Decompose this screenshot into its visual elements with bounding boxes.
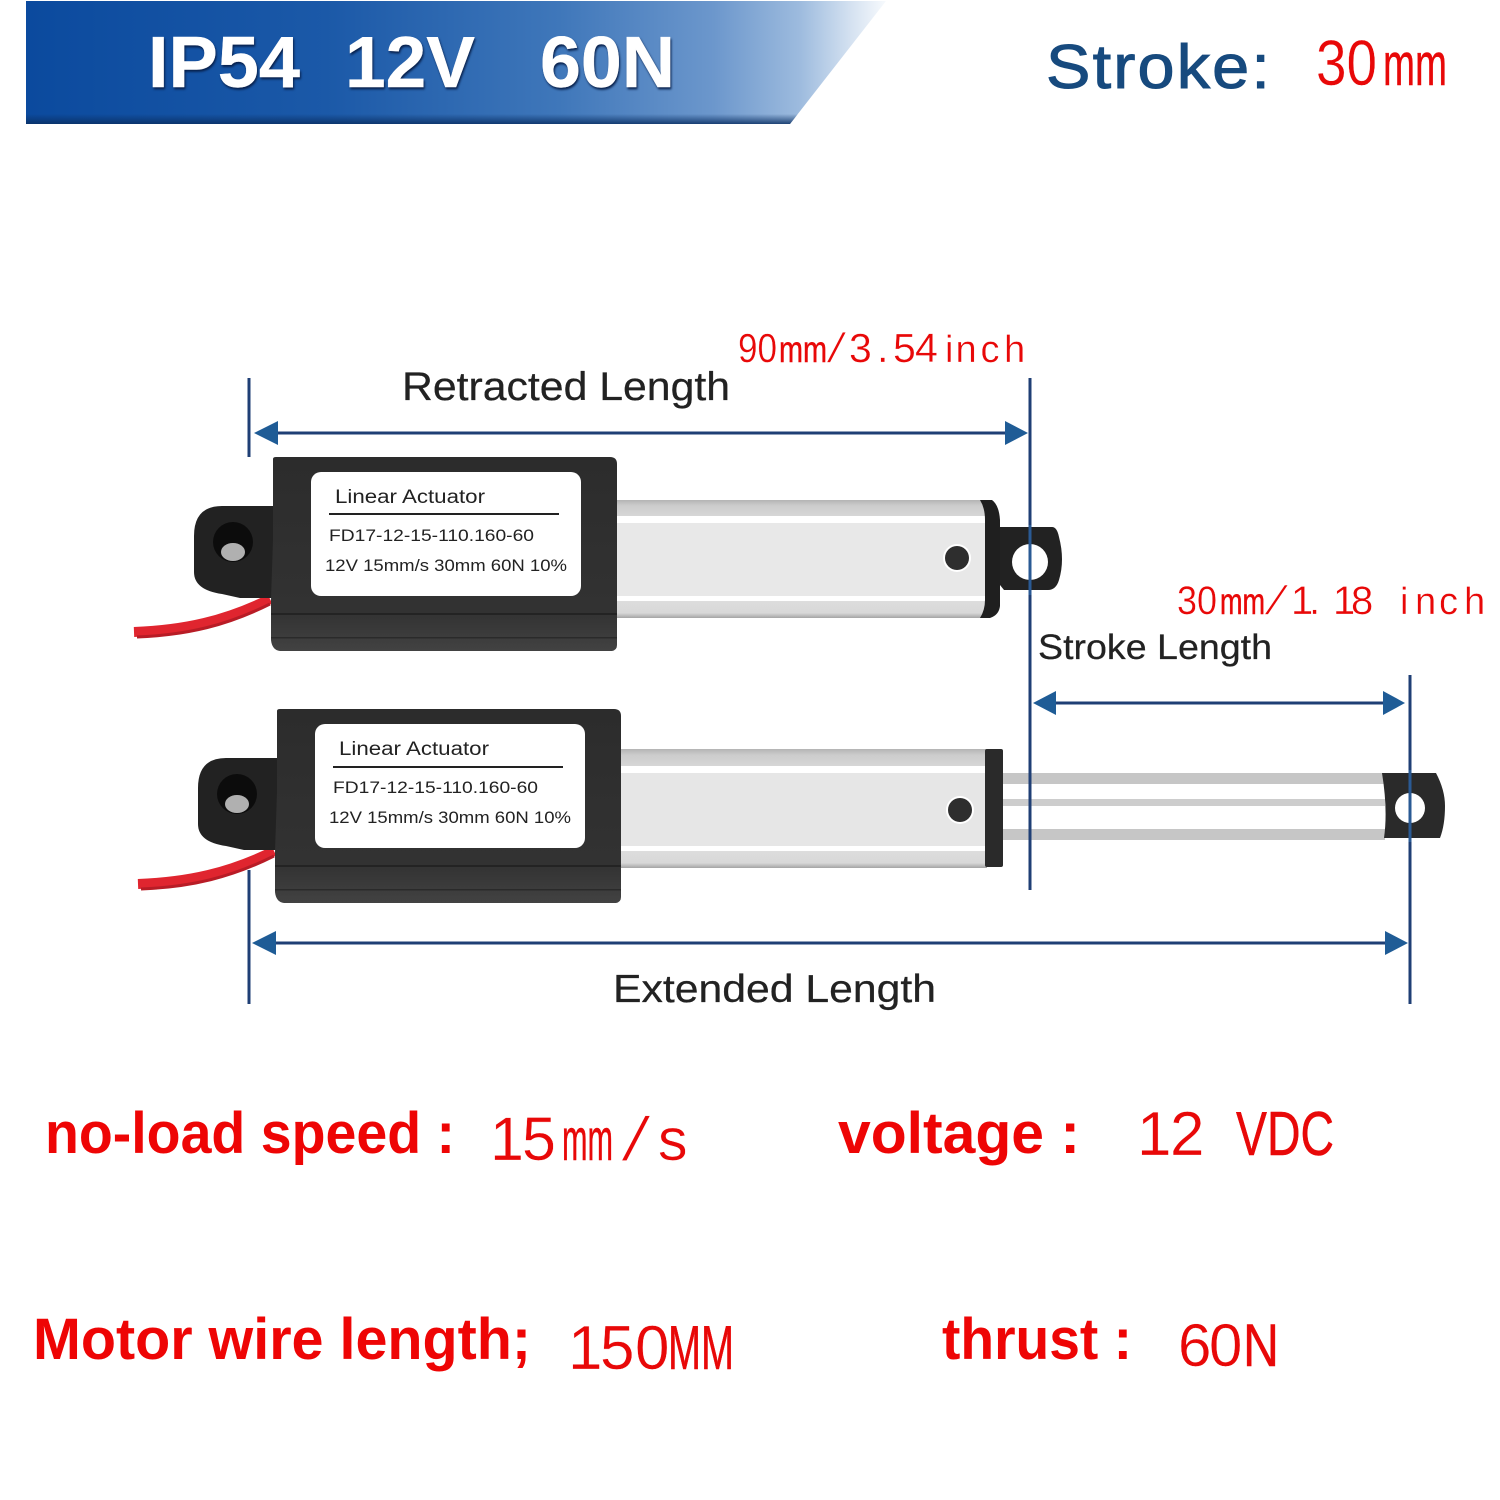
label: Linear Actuator: [339, 739, 490, 760]
end cap: [980, 500, 1000, 618]
spec: thrust: [942, 1307, 1279, 1379]
rod eye: [1382, 773, 1445, 838]
mounting tab: [198, 758, 279, 850]
stroke length value: /: [1262, 577, 1291, 623]
header banner: [26, 1, 886, 124]
tab hole: [217, 774, 257, 814]
banner title: 12V: [345, 23, 475, 103]
spec: voltage: 12: [1137, 1100, 1204, 1169]
stroke length value: 30: [1177, 579, 1217, 623]
housing: [271, 457, 617, 651]
line over extended eye: [1408, 770, 1412, 842]
spec: thrust: 60: [1178, 1312, 1242, 1379]
housing: [275, 709, 621, 903]
stroke length value: 1.18: [1291, 579, 1373, 623]
line over rod: [1028, 770, 1032, 845]
stroke heading: [1046, 27, 1447, 102]
banner title: IP54: [148, 23, 300, 103]
mounting pin: [943, 544, 971, 572]
retracted length label: Retracted Length: [402, 365, 730, 409]
retracted length value: 3.54: [849, 325, 938, 371]
label: FD17-12-15-110.160-60: [333, 778, 538, 797]
stroke length value: inch: [1400, 581, 1485, 623]
label: [315, 724, 585, 848]
label: Linear Actuator: [335, 487, 486, 508]
retracted length value: 90: [738, 325, 777, 371]
spec: voltage: VDC: [1236, 1100, 1334, 1169]
spec: motor wire length: Motor wire length;: [33, 1307, 531, 1372]
spec: motor wire length: [33, 1307, 734, 1383]
spec: no-load speed: 15: [490, 1105, 556, 1173]
spec: no-load speed: mm: [562, 1107, 613, 1173]
spec: no-load speed: /: [619, 1106, 653, 1174]
cylinder: [617, 500, 985, 618]
line over retracted eye: [1028, 525, 1032, 595]
spec: voltage: voltage :: [838, 1101, 1080, 1166]
tab hole: [213, 522, 253, 562]
spec: no-load speed: no-load speed :: [45, 1101, 455, 1166]
retracted length value: mm: [779, 329, 827, 370]
spec: no-load speed: s: [658, 1107, 688, 1173]
spec: motor wire length: 150: [568, 1314, 669, 1383]
end cap: [985, 749, 1003, 867]
spec: motor wire length: MM: [668, 1314, 734, 1383]
red wire: [138, 851, 274, 889]
red wire: [134, 599, 270, 637]
piston rod: [1003, 773, 1385, 840]
stroke heading: mm: [1383, 31, 1447, 98]
stroke heading: Stroke:: [1046, 33, 1272, 102]
banner title: 60N: [540, 23, 675, 103]
extended length label: Extended Length: [613, 968, 936, 1011]
dimension lines: [249, 378, 1410, 1004]
stroke length value: mm: [1220, 581, 1265, 622]
spec: thrust: N: [1243, 1312, 1279, 1379]
spec: voltage: [838, 1100, 1334, 1169]
retracted length value: [738, 325, 1025, 371]
retracted length value: inch: [945, 329, 1025, 371]
label: FD17-12-15-110.160-60: [329, 526, 534, 545]
stroke length value: [1177, 577, 1485, 623]
mounting tab: [194, 506, 275, 598]
label: 12V 15mm/s 30mm 60N 10%: [325, 556, 567, 575]
actuator: extended: [138, 709, 1445, 903]
actuator: retracted: [134, 457, 1062, 651]
label: 12V 15mm/s 30mm 60N 10%: [329, 808, 571, 827]
label: [311, 472, 581, 596]
rod eye: [1000, 527, 1062, 590]
spec: no-load speed: [45, 1101, 688, 1174]
stroke heading: 30: [1316, 27, 1377, 99]
banner title: [148, 23, 675, 103]
cylinder: [621, 749, 987, 868]
mounting pin: [946, 796, 974, 824]
retracted length value: /: [825, 325, 848, 371]
stroke length label: Stroke Length: [1038, 628, 1272, 667]
spec: thrust: thrust :: [942, 1307, 1132, 1372]
